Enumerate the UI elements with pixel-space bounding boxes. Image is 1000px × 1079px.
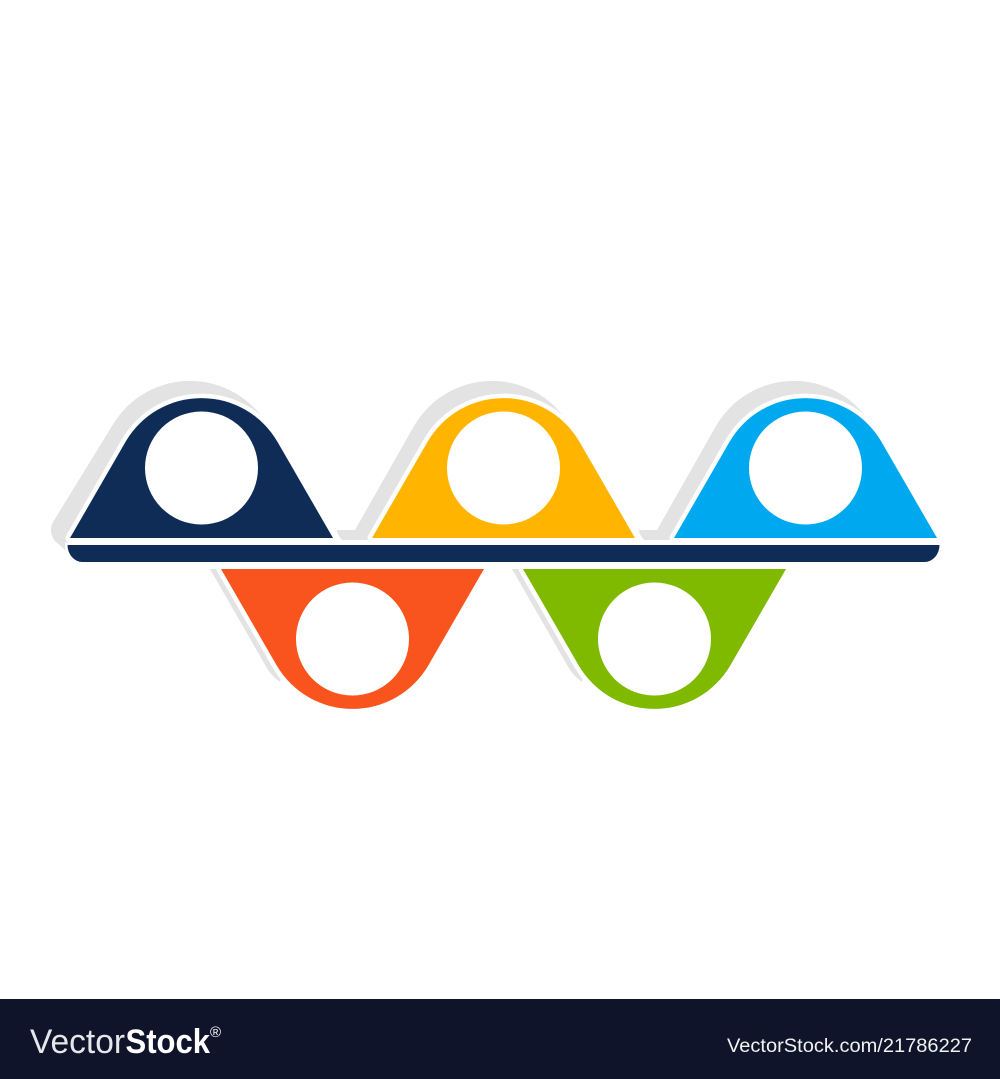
footer image id: VectorStock.com/21786227: [727, 1035, 972, 1057]
grey shadows behind lower markers: [210, 569, 602, 682]
footer logo: [30, 1023, 221, 1061]
marker 1: navy: [70, 398, 333, 538]
marker 2: yellow: [372, 398, 635, 538]
marker 3: blue: [674, 398, 937, 538]
footer logo: ®: [210, 1024, 221, 1041]
horizontal navy bar: [68, 545, 940, 562]
footer band: [0, 999, 1000, 1079]
footer logo: Vector: [30, 1023, 125, 1061]
marker 4: orange: [221, 569, 484, 709]
footer logo: Stock: [126, 1023, 210, 1061]
grey shadows behind upper markers: [51, 381, 872, 551]
marker 5: green: [523, 569, 786, 709]
